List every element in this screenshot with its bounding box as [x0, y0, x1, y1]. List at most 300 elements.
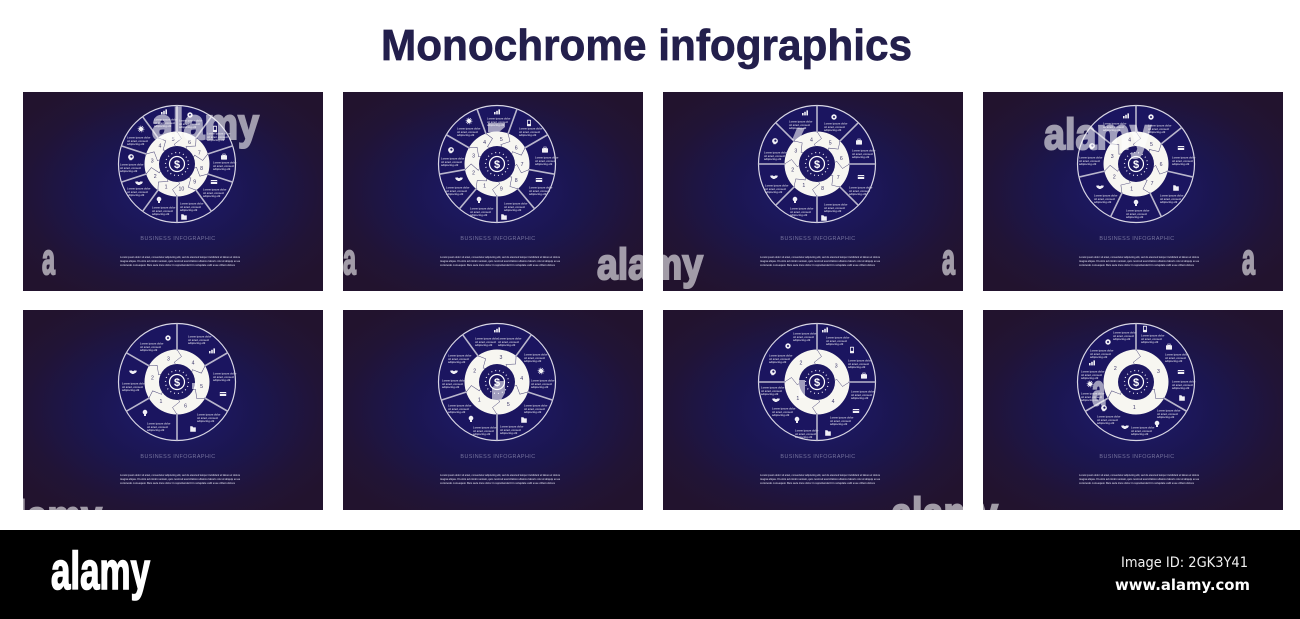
segment captions: adipiscing elit [448, 410, 465, 414]
step numbers: 7 [198, 150, 201, 156]
segment captions [1081, 330, 1196, 436]
segment captions: Lorem ipsum dolor [120, 162, 144, 166]
segment captions: adipiscing elit [789, 126, 806, 130]
segment captions: Lorem ipsum dolor [1148, 124, 1172, 128]
segment captions: adipiscing elit [769, 360, 786, 364]
segment captions: sit amet, consect [500, 428, 521, 432]
segment captions: Lorem ipsum dolor [1097, 414, 1120, 418]
segment captions: Lorem ipsum dolor [531, 378, 554, 382]
heading: business infographic: BUSINESS INFOGRAPHIC [1099, 236, 1175, 242]
watermarks: alamy [152, 100, 259, 149]
body text: Lorem ipsum dolor sit amet, consectetur adipiscing elit, sed do eiusmod tempor incididunt ut labore et dolore [440, 473, 560, 477]
segment captions: sit amet, consect [535, 159, 556, 163]
segment captions: sit amet, consect [446, 189, 467, 193]
segment captions: adipiscing elit [1126, 215, 1143, 219]
segment captions: sit amet, consect [504, 205, 525, 209]
segment captions: adipiscing elit [1094, 200, 1111, 204]
segment captions: Lorem ipsum dolor [504, 202, 528, 206]
step numbers: 2 [154, 174, 157, 180]
step numbers: 4 [810, 137, 813, 143]
segment captions: adipiscing elit [1172, 386, 1189, 390]
segment captions: sit amet, consect [213, 375, 234, 379]
segment captions: adipiscing elit [1081, 398, 1098, 402]
body text: Lorem ipsum dolor sit amet, consectetur adipiscing elit, sed do eiusmod tempor incididunt ut labore et dolore [1079, 255, 1199, 259]
segment captions: sit amet, consect [1103, 125, 1124, 129]
segment captions: sit amet, consect [764, 154, 785, 158]
segment captions: Lorem ipsum dolor [213, 160, 236, 164]
segment captions: sit amet, consect [1113, 334, 1134, 338]
segment captions: Lorem ipsum dolor [519, 126, 542, 130]
body text: magna aliqua. Ut enim ad minim veniam, quis nostrud exercitation ullamco laboris nisi ut aliquip ex ea [440, 477, 560, 481]
segment captions: Lorem ipsum dolor [1172, 380, 1196, 384]
segment captions: sit amet, consect [848, 362, 869, 366]
wheel: nine segments: $ [494, 159, 500, 171]
segment captions: Lorem ipsum dolor [127, 186, 150, 190]
segment captions: adipiscing elit [457, 133, 474, 137]
segment captions: sit amet, consect [1094, 197, 1115, 201]
body text: commodo consequat. Duis aute irure dolor in reprehenderit in voluptate velit esse cillum dolore [760, 481, 875, 485]
heading: business infographic: BUSINESS INFOGRAPHIC [780, 454, 856, 460]
segment captions: sit amet, consect [203, 191, 224, 195]
heading: business infographic: BUSINESS INFOGRAPHIC [140, 236, 216, 242]
panel: three-step wheel [983, 310, 1283, 510]
site address: www.alamy.com [1115, 576, 1250, 594]
segment icons [770, 327, 867, 436]
segment captions: adipiscing elit [475, 343, 492, 347]
heading: business infographic: BUSINESS INFOGRAPHIC [1099, 454, 1175, 460]
segment captions: sit amet, consect [519, 130, 540, 134]
step numbers: 3 [499, 355, 502, 361]
segment captions: adipiscing elit [1113, 337, 1130, 341]
step numbers: 1 [796, 396, 799, 402]
segment captions: Lorem ipsum dolor [197, 412, 220, 416]
body text: commodo consequat. Duis aute irure dolor in reprehenderit in voluptate velit esse cillum dolore [760, 263, 875, 267]
segment captions: adipiscing elit [179, 125, 196, 129]
segment captions: Lorem ipsum dolor [154, 118, 178, 122]
segment captions [764, 120, 876, 217]
step numbers: 6 [184, 403, 187, 409]
segment captions: adipiscing elit [849, 192, 866, 196]
segment captions: Lorem ipsum dolor [446, 186, 470, 190]
segment captions: adipiscing elit [1079, 162, 1096, 166]
step numbers: 8 [515, 178, 518, 184]
segment captions: sit amet, consect [824, 125, 845, 129]
watermarks: a [1092, 366, 1105, 415]
footer logo: alamy [51, 542, 150, 601]
step numbers: 7 [1151, 181, 1154, 187]
segment captions: adipiscing elit [851, 396, 868, 400]
segment captions: sit amet, consect [179, 122, 200, 126]
segment captions: Lorem ipsum dolor [448, 354, 472, 358]
segment captions: adipiscing elit [1141, 340, 1158, 344]
step numbers: 7 [837, 175, 840, 181]
segment captions: adipiscing elit [470, 213, 487, 217]
step numbers: 5 [500, 137, 503, 143]
body text: commodo consequat. Duis aute irure dolor in reprehenderit in voluptate velit esse cillum dolore [1079, 263, 1194, 267]
segment captions: sit amet, consect [127, 190, 148, 194]
segment captions: adipiscing elit [765, 190, 782, 194]
segment captions: sit amet, consect [761, 389, 782, 393]
segment captions: adipiscing elit [152, 212, 169, 216]
step numbers: 9 [193, 179, 196, 185]
step numbers [1111, 138, 1163, 192]
segment captions: adipiscing elit [529, 192, 546, 196]
segment captions: adipiscing elit [442, 385, 459, 389]
step numbers [151, 137, 203, 192]
body text: commodo consequat. Duis aute irure dolor in reprehenderit in voluptate velit esse cillum dolore [120, 263, 235, 267]
watermarks [0, 100, 1255, 541]
segment captions: adipiscing elit [188, 341, 205, 345]
step numbers [791, 137, 843, 192]
segment captions: sit amet, consect [122, 385, 143, 389]
wheel: six segments: $ [174, 377, 180, 389]
body text [760, 255, 880, 267]
segment captions: sit amet, consect [1081, 373, 1102, 377]
step numbers: 1 [483, 183, 486, 189]
segment captions: adipiscing elit [203, 194, 220, 198]
segment captions [120, 118, 236, 216]
segment captions: adipiscing elit [519, 133, 536, 137]
wheel: nine segments [438, 106, 560, 267]
wheel: eight segments [758, 106, 880, 267]
segment captions: sit amet, consect [849, 189, 870, 193]
step numbers: 6 [515, 146, 518, 152]
panel: seven-step wheel [983, 92, 1283, 291]
segment captions: sit amet, consect [1157, 412, 1178, 416]
segment captions: adipiscing elit [1165, 359, 1182, 363]
panel: six-step wheel [23, 310, 323, 510]
step numbers: 5 [829, 141, 832, 147]
watermarks: a [343, 235, 356, 284]
segment captions: Lorem ipsum dolor [1160, 194, 1184, 198]
segment captions: adipiscing elit [448, 360, 465, 364]
segment captions: sit amet, consect [1160, 197, 1181, 201]
wheel: seven segments: $ [1133, 159, 1139, 171]
body text: Lorem ipsum dolor sit amet, consectetur adipiscing elit, sed do eiusmod tempor incididunt ut labore et dolore [120, 255, 240, 259]
step numbers: 5 [1150, 142, 1153, 148]
heading: business infographic: BUSINESS INFOGRAPHIC [460, 454, 536, 460]
segment icons [770, 110, 864, 221]
step numbers: 3 [1111, 154, 1114, 160]
segment captions: sit amet, consect [180, 205, 201, 209]
wheel: four segments: $ [814, 377, 820, 389]
segment captions: adipiscing elit [535, 162, 552, 166]
segment captions: adipiscing elit [524, 410, 541, 414]
segment captions: adipiscing elit [830, 422, 847, 426]
segment captions: adipiscing elit [1090, 355, 1107, 359]
wheel: five segments [438, 324, 560, 485]
segment captions: sit amet, consect [830, 419, 851, 423]
step numbers [472, 137, 524, 192]
step numbers: 3 [835, 364, 838, 370]
segment captions: Lorem ipsum dolor [213, 372, 236, 376]
segment captions: adipiscing elit [531, 385, 548, 389]
segment icons [448, 109, 548, 220]
segment captions: Lorem ipsum dolor [203, 188, 226, 192]
segment captions: Lorem ipsum dolor [147, 422, 170, 426]
segment captions: Lorem ipsum dolor [122, 382, 146, 386]
segment icons [129, 335, 226, 432]
wheel: three segments [1078, 324, 1199, 485]
segment captions: adipiscing elit [120, 169, 137, 173]
segment captions: sit amet, consect [524, 407, 545, 411]
segment captions: sit amet, consect [207, 135, 228, 139]
segment captions: Lorem ipsum dolor [1094, 194, 1118, 198]
panel: nine-step wheel [343, 92, 643, 291]
segment captions: Lorem ipsum dolor [1141, 334, 1164, 338]
heading: business infographic: BUSINESS INFOGRAPHIC [460, 236, 536, 242]
segment captions: adipiscing elit [772, 413, 789, 417]
body text [120, 255, 240, 267]
segment captions: Lorem ipsum dolor [1079, 156, 1102, 160]
segment captions: adipiscing elit [140, 348, 157, 352]
segment captions: Lorem ipsum dolor [851, 390, 874, 394]
body text: Lorem ipsum dolor sit amet, consectetur adipiscing elit, sed do eiusmod tempor incididunt ut labore et dolore [760, 255, 880, 259]
panel: four-step wheel [663, 310, 963, 510]
segment captions: sit amet, consect [470, 210, 491, 214]
segment captions [441, 116, 558, 217]
segment captions: sit amet, consect [1126, 212, 1147, 216]
body text: magna aliqua. Ut enim ad minim veniam, quis nostrud exercitation ullamco laboris nisi ut aliquip ex ea [760, 259, 880, 263]
segment captions: sit amet, consect [140, 345, 161, 349]
segment captions: adipiscing elit [441, 163, 458, 167]
step numbers: 2 [1113, 174, 1116, 180]
segment captions: Lorem ipsum dolor [529, 186, 552, 190]
segment captions: Lorem ipsum dolor [180, 202, 204, 206]
segment captions: sit amet, consect [441, 160, 462, 164]
segment captions: adipiscing elit [790, 213, 807, 217]
body text [1079, 255, 1199, 267]
segment captions: adipiscing elit [524, 359, 541, 363]
heading: business infographic: BUSINESS INFOGRAPHIC [780, 236, 856, 242]
step numbers: 5 [200, 384, 203, 390]
segment captions: sit amet, consect [457, 130, 478, 134]
segment captions: adipiscing elit [1081, 376, 1098, 380]
segment icons [450, 327, 544, 423]
body text: Lorem ipsum dolor sit amet, consectetur adipiscing elit, sed do eiusmod tempor incididunt ut labore et dolore [440, 255, 560, 259]
body text [120, 473, 240, 485]
segment captions: adipiscing elit [154, 124, 171, 128]
watermarks: a [942, 235, 955, 284]
step numbers: 2 [799, 361, 802, 367]
segment captions: Lorem ipsum dolor [152, 206, 176, 210]
segment captions: adipiscing elit [473, 432, 490, 436]
step numbers: 3 [1157, 369, 1160, 375]
segment captions: adipiscing elit [1157, 415, 1174, 419]
segment captions: adipiscing elit [824, 209, 841, 213]
step numbers: 8 [821, 186, 824, 192]
wheel: five segments: $ [494, 377, 500, 389]
segment captions: Lorem ipsum dolor [1081, 370, 1104, 374]
segment captions: Lorem ipsum dolor [765, 184, 788, 188]
body text: magna aliqua. Ut enim ad minim veniam, quis nostrud exercitation ullamco laboris nisi ut aliquip ex ea [120, 259, 240, 263]
segment captions: adipiscing elit [127, 193, 144, 197]
step numbers: 9 [500, 186, 503, 192]
segment captions: adipiscing elit [761, 392, 778, 396]
wheel: ten segments: $ [174, 159, 180, 171]
watermarks: a [1242, 235, 1255, 284]
segment captions: sit amet, consect [1081, 395, 1102, 399]
segment captions: adipiscing elit [1148, 130, 1165, 134]
watermarks: alamy [1044, 110, 1151, 159]
segment captions: sit amet, consect [120, 166, 141, 170]
body text: magna aliqua. Ut enim ad minim veniam, quis nostrud exercitation ullamco laboris nisi ut aliquip ex ea [440, 259, 560, 263]
segment captions: adipiscing elit [764, 157, 781, 161]
step numbers [151, 356, 203, 409]
segment captions: Lorem ipsum dolor [1172, 156, 1196, 160]
segment icons [128, 109, 227, 220]
wheel: three segments: $ [1133, 377, 1139, 389]
body text: magna aliqua. Ut enim ad minim veniam, quis nostrud exercitation ullamco laboris nisi ut aliquip ex ea [1079, 259, 1199, 263]
segment captions: sit amet, consect [789, 123, 810, 127]
segment captions: sit amet, consect [197, 416, 218, 420]
segment captions: Lorem ipsum dolor [852, 148, 876, 152]
segment captions: Lorem ipsum dolor [849, 186, 872, 190]
image id: Image ID: 2GK3Y41 [1121, 555, 1248, 571]
step numbers: 4 [192, 361, 195, 367]
segment captions: sit amet, consect [1131, 429, 1152, 433]
step numbers: 2 [1114, 366, 1117, 372]
step numbers: 4 [832, 399, 835, 405]
segment captions [122, 334, 236, 432]
segment captions: adipiscing elit [504, 208, 521, 212]
step numbers [473, 355, 523, 408]
step numbers: 4 [483, 140, 486, 146]
segment captions: adipiscing elit [848, 365, 865, 369]
body text: commodo consequat. Duis aute irure dolor in reprehenderit in voluptate velit esse cillum dolore [440, 263, 555, 267]
segment captions: Lorem ipsum dolor [824, 202, 848, 206]
step numbers: 3 [794, 149, 797, 155]
segment captions: sit amet, consect [1079, 159, 1100, 163]
segment captions: adipiscing elit [795, 435, 812, 439]
segment captions: adipiscing elit [197, 419, 214, 423]
step numbers: 1 [802, 183, 805, 189]
segment captions: Lorem ipsum dolor [475, 336, 498, 340]
step numbers: 1 [478, 397, 481, 403]
body text: magna aliqua. Ut enim ad minim veniam, quis nostrud exercitation ullamco laboris nisi ut aliquip ex ea [760, 477, 880, 481]
segment captions: Lorem ipsum dolor [524, 404, 548, 408]
body text [1079, 473, 1199, 485]
step numbers: 1 [1130, 186, 1133, 192]
segment captions: Lorem ipsum dolor [1090, 348, 1114, 352]
watermarks: alamy [891, 489, 998, 538]
wheel: seven segments [1078, 106, 1199, 267]
segment captions: Lorem ipsum dolor [127, 136, 150, 140]
segment captions: sit amet, consect [448, 407, 469, 411]
segment captions: sit amet, consect [1141, 337, 1162, 341]
segment captions: Lorem ipsum dolor [473, 426, 496, 430]
segment captions: sit amet, consect [1090, 352, 1111, 356]
segment captions: Lorem ipsum dolor [824, 122, 848, 126]
segment captions: Lorem ipsum dolor [442, 378, 466, 382]
segment captions: adipiscing elit [213, 378, 230, 382]
segment captions: Lorem ipsum dolor [470, 206, 494, 210]
step numbers: 4 [520, 376, 523, 382]
segment captions: Lorem ipsum dolor [1113, 330, 1136, 334]
step numbers: 2 [151, 375, 154, 381]
segment captions: Lorem ipsum dolor [207, 132, 230, 136]
segment captions: adipiscing elit [127, 142, 144, 146]
panel: five-step wheel [343, 310, 643, 510]
segment captions: Lorem ipsum dolor [772, 406, 796, 410]
panel: eight-step wheel [663, 92, 963, 291]
step numbers: 5 [507, 402, 510, 408]
segment captions: sit amet, consect [772, 410, 793, 414]
segment captions: Lorem ipsum dolor [1157, 408, 1180, 412]
segment captions: adipiscing elit [487, 123, 504, 127]
body text [760, 473, 880, 485]
segment captions: sit amet, consect [851, 393, 872, 397]
segment captions: Lorem ipsum dolor [795, 428, 818, 432]
body text: Lorem ipsum dolor sit amet, consectetur adipiscing elit, sed do eiusmod tempor incididunt ut labore et dolore [1079, 473, 1199, 477]
step numbers: 8 [200, 166, 203, 172]
footer band [0, 530, 1300, 619]
body text [440, 473, 560, 485]
step numbers: 3 [167, 356, 170, 362]
segment captions: sit amet, consect [1172, 159, 1193, 163]
segment captions: adipiscing elit [1172, 162, 1189, 166]
segment captions: Lorem ipsum dolor [500, 424, 524, 428]
segment icons [1089, 113, 1184, 206]
segment captions: Lorem ipsum dolor [1131, 426, 1154, 430]
segment captions: Lorem ipsum dolor [524, 352, 548, 356]
segment captions: sit amet, consect [154, 121, 175, 125]
title: Monochrome infographics [381, 21, 912, 70]
wheel: four segments [758, 324, 880, 485]
segment captions: adipiscing elit [1160, 200, 1177, 204]
segment captions: sit amet, consect [213, 164, 234, 168]
step numbers: 6 [188, 140, 191, 146]
segment captions: Lorem ipsum dolor [1103, 122, 1126, 126]
segment captions [442, 336, 554, 436]
segment captions: Lorem ipsum dolor [790, 206, 814, 210]
segment captions: Lorem ipsum dolor [769, 354, 792, 358]
segment captions: Lorem ipsum dolor [448, 404, 472, 408]
segment captions: Lorem ipsum dolor [188, 334, 212, 338]
step numbers: 1 [1133, 405, 1136, 411]
segment captions: Lorem ipsum dolor [498, 336, 522, 340]
segment captions: sit amet, consect [147, 425, 168, 429]
step numbers: 3 [472, 153, 475, 159]
segment captions: Lorem ipsum dolor [764, 150, 788, 154]
segment captions: sit amet, consect [824, 206, 845, 210]
segment captions: sit amet, consect [473, 429, 494, 433]
segment captions: Lorem ipsum dolor [830, 416, 854, 420]
segment captions [1079, 122, 1196, 219]
body text: magna aliqua. Ut enim ad minim veniam, quis nostrud exercitation ullamco laboris nisi ut aliquip ex ea [1079, 477, 1199, 481]
step numbers: 4 [1128, 138, 1131, 144]
body text: Lorem ipsum dolor sit amet, consectetur adipiscing elit, sed do eiusmod tempor incididunt ut labore et dolore [120, 473, 240, 477]
segment captions: sit amet, consect [529, 189, 550, 193]
segment captions: sit amet, consect [487, 120, 508, 124]
step numbers: 5 [172, 137, 175, 143]
segment captions: Lorem ipsum dolor [789, 120, 812, 124]
wheel: six segments [118, 324, 240, 485]
segment captions: Lorem ipsum dolor [826, 336, 850, 340]
segment captions: sit amet, consect [1165, 356, 1186, 360]
segment captions: sit amet, consect [793, 335, 814, 339]
segment captions: adipiscing elit [826, 342, 843, 346]
step numbers: 2 [791, 167, 794, 173]
segment captions: sit amet, consect [852, 152, 873, 156]
segment captions: adipiscing elit [500, 431, 517, 435]
segment captions [761, 332, 874, 439]
segment captions: Lorem ipsum dolor [1081, 392, 1104, 396]
segment captions: adipiscing elit [147, 428, 164, 432]
segment captions: Lorem ipsum dolor [457, 126, 480, 130]
segment captions: sit amet, consect [448, 357, 469, 361]
segment captions: sit amet, consect [1172, 383, 1193, 387]
